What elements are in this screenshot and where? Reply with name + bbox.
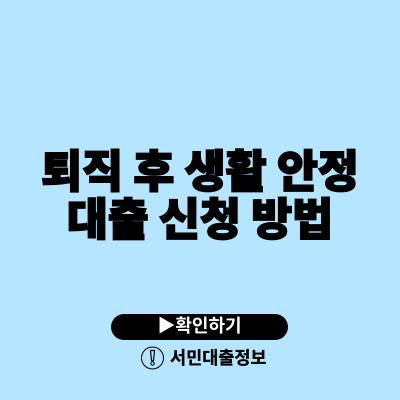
icon: exclamation circle [141,346,164,370]
button: confirm [111,314,288,340]
title [41,148,359,245]
button: confirm: ▶확인하기 [157,316,242,336]
title line 1: 퇴직 후 생활 안정 [41,148,359,197]
brand logo [141,346,267,370]
title line 2: 대출 신청 방법 [67,196,333,245]
brand name: 서민대출정보 [170,348,267,368]
